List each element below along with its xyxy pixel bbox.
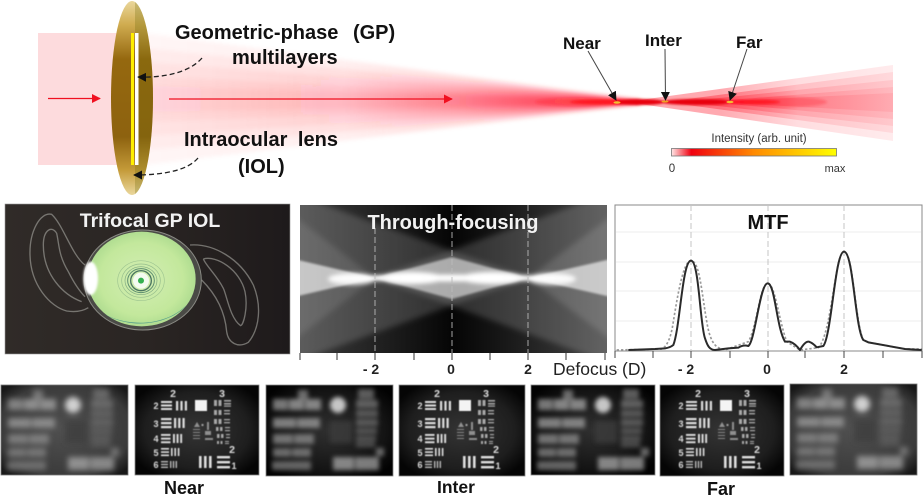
label: intraocular lens: Intraocular lens bbox=[184, 129, 338, 151]
geometric-phase layers bbox=[131, 33, 138, 165]
bright cones bbox=[285, 257, 620, 299]
image: sharp target inter: 5 bbox=[417, 448, 423, 458]
label: geometric-phase multilayers: multilayers bbox=[232, 47, 338, 69]
image: sharp target inter: 2 bbox=[417, 401, 423, 411]
image: sharp target near: 3 bbox=[219, 388, 225, 400]
image: sharp target far bbox=[660, 385, 784, 476]
image: sharp target far: 6 bbox=[678, 460, 684, 470]
label: geometric-phase multilayers: Geometric-phase (GP) bbox=[175, 22, 395, 44]
diffractive rings bbox=[118, 261, 164, 301]
dashed arrow: IOL bbox=[134, 158, 198, 175]
icon: intraocular lens bbox=[111, 1, 153, 195]
image: sharp target inter: 4 bbox=[417, 434, 423, 444]
chart axis numbers bbox=[678, 361, 848, 377]
image: sharp target near: 2 bbox=[229, 444, 235, 456]
focus label: far bbox=[730, 33, 763, 100]
arrow: transmitted light bbox=[169, 98, 452, 100]
focus label: inter: Inter bbox=[645, 31, 682, 50]
legend: intensity colour bar: 0 bbox=[669, 163, 675, 175]
image: sharp target far: 2 bbox=[678, 401, 684, 411]
image: blurred target 3 bbox=[531, 385, 655, 475]
image: sharp target near: 2 bbox=[153, 401, 159, 411]
image: sharp target far: 1 bbox=[756, 461, 762, 471]
image: sharp target inter: 1 bbox=[495, 461, 501, 471]
image: blurred target 4 bbox=[790, 384, 917, 475]
axis numbers: 0 bbox=[447, 361, 455, 377]
legend: intensity colour bar: max bbox=[825, 163, 846, 175]
focus label: near: Near bbox=[563, 34, 601, 53]
panel: optical schematic bbox=[38, 1, 893, 195]
label: intraocular lens: (IOL) bbox=[238, 156, 285, 178]
image: sharp target far: 3 bbox=[744, 388, 750, 400]
arrow: incoming light bbox=[48, 98, 100, 100]
image: sharp target near: 4 bbox=[153, 434, 159, 444]
image: sharp target inter: 2 bbox=[493, 444, 499, 456]
image: sharp target far: 3 bbox=[678, 419, 684, 429]
focus label: far: Far bbox=[736, 33, 763, 52]
axis numbers: 2 bbox=[524, 361, 532, 377]
image: blurred target 1 bbox=[1, 385, 128, 475]
image: sharp target inter: 3 bbox=[483, 388, 489, 400]
panel: through-focusing map bbox=[300, 205, 607, 374]
image: sharp target near: 1 bbox=[231, 461, 237, 471]
MTF dotted curve bbox=[617, 252, 922, 350]
image: sharp target inter: 2 bbox=[434, 388, 440, 400]
IOL optic bbox=[84, 230, 201, 330]
panel: MTF chart bbox=[615, 205, 922, 377]
image: sharp target near: 5 bbox=[153, 448, 159, 458]
label: geometric-phase multilayers bbox=[175, 22, 395, 69]
image: sharp target near: 3 bbox=[153, 419, 159, 429]
axis title: defocus: Defocus (D) bbox=[553, 359, 646, 379]
image: sharp target inter: 6 bbox=[417, 460, 423, 470]
legend: intensity colour bar bbox=[669, 133, 846, 175]
image: sharp target far: 5 bbox=[678, 448, 684, 458]
image: sharp target near: 6 bbox=[153, 460, 159, 470]
chart axis numbers: 0 bbox=[763, 361, 771, 377]
focus label: near bbox=[563, 34, 616, 100]
photo title: Trifocal GP IOL bbox=[80, 210, 220, 232]
dashed guide lines bbox=[375, 205, 528, 353]
label: intraocular lens bbox=[184, 129, 338, 178]
image: sharp target inter: 3 bbox=[417, 419, 423, 429]
incident light beam bbox=[38, 33, 128, 165]
image: sharp target near bbox=[135, 385, 259, 475]
MTF solid curve bbox=[628, 252, 922, 350]
focus label: inter bbox=[645, 31, 682, 100]
chart axis numbers: - 2 bbox=[678, 361, 694, 377]
image: sharp target near: 2 bbox=[170, 388, 176, 400]
chart axis numbers: 2 bbox=[840, 361, 848, 377]
image: blurred target 2 bbox=[266, 385, 393, 476]
chart title: MTF bbox=[747, 212, 789, 234]
converging beam bbox=[145, 33, 893, 165]
legend: intensity colour bar: Intensity (arb. unit) bbox=[711, 133, 807, 145]
diverging beam bbox=[640, 65, 893, 141]
image: sharp target far: 4 bbox=[678, 434, 684, 444]
image: sharp target inter bbox=[399, 385, 525, 476]
focal spots bbox=[535, 97, 827, 107]
axis numbers: - 2 bbox=[363, 361, 379, 377]
axis numbers bbox=[363, 361, 532, 377]
image: sharp target far: 2 bbox=[754, 444, 760, 456]
focal band bbox=[328, 272, 576, 285]
dashed arrow: GP layers bbox=[138, 58, 202, 77]
IOL haptics bbox=[30, 214, 259, 345]
glare bbox=[83, 262, 98, 295]
image: sharp target far: 2 bbox=[695, 388, 701, 400]
dim outer cones bbox=[300, 205, 607, 353]
axis ticks bbox=[300, 353, 605, 360]
panel: trifocal GP IOL photo bbox=[5, 204, 290, 354]
map title: Through-focusing bbox=[367, 212, 539, 234]
